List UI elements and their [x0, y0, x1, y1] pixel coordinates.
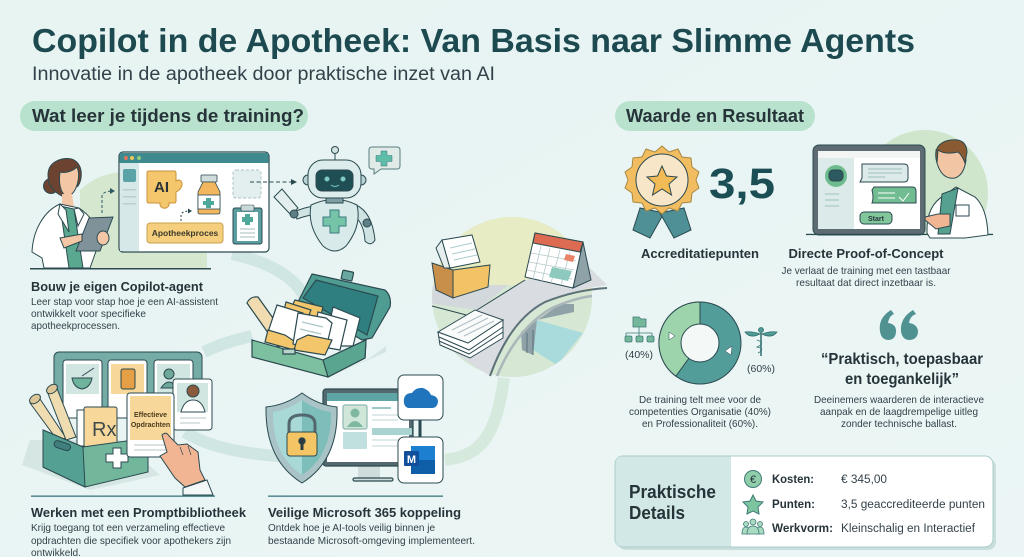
- row: Kosten: Kosten:: [772, 474, 814, 486]
- panel: practical details: [615, 456, 996, 550]
- icon: shield with lock: [266, 393, 337, 483]
- card: Effectieve Opdrachten: Opdrachten: [131, 422, 170, 429]
- row: Werkvorm: Kleinschalig en Interactief: [841, 523, 976, 535]
- heading: value: Waarde en Resultaat: [626, 105, 804, 126]
- icon: mail tile: [398, 437, 443, 483]
- description: ontwikkelt voor specifieke: [31, 308, 146, 320]
- icon: quote marks: [880, 310, 918, 340]
- icon: clipboard: [233, 205, 262, 244]
- description: opdrachten die specifiek voor apothekers zijn: [31, 535, 231, 547]
- label: accreditatiepunten: Accreditatiepunten: [641, 246, 759, 261]
- icon: medicine bottle: [198, 175, 220, 214]
- icon: cloud tile: [398, 375, 443, 420]
- description: De training telt mee voor de: [639, 394, 761, 406]
- description: bestaande Microsoft-omgeving implementeert.: [268, 535, 475, 547]
- description: Deeinemers waarderen de interactieve: [814, 394, 984, 406]
- label: 40%: (40%): [625, 349, 653, 361]
- description: aanpak en de laagdrempelige uitleg: [820, 406, 978, 418]
- heading: value: [615, 101, 815, 131]
- icon: prompt cards and box: [22, 352, 202, 490]
- row: Werkvorm: Werkvorm:: [772, 523, 833, 535]
- panel: accreditation: [625, 146, 775, 261]
- icon: tablet screen: [813, 145, 925, 235]
- panel: secure Microsoft 365: [266, 375, 475, 547]
- description: Ontdek hoe je AI-tools veilig binnen je: [268, 522, 435, 534]
- heading: training: Wat leer je tijdens de training?: [32, 105, 304, 126]
- panel: app window: [119, 152, 269, 252]
- icon: doctor card: [173, 379, 212, 430]
- heading: Praktische Details: Praktische: [629, 482, 716, 502]
- description: competenties Organisatie (40%): [629, 406, 771, 418]
- description: Je verlaat de training met een tastbaar: [782, 265, 951, 277]
- icon: pharmacist pointing: [925, 140, 988, 238]
- label: Apotheekproces: Apotheekproces: [152, 228, 219, 238]
- icon: folder with documents: [432, 235, 490, 298]
- icon: paper stack: [438, 310, 503, 358]
- illustration: bridge with documents and calendar: [425, 215, 607, 380]
- panel: build copilot agent: [30, 146, 400, 332]
- stat: 3,5: 3,5: [709, 160, 775, 208]
- subtitle: Innovatie in de apotheek door praktische inzet van AI: [32, 64, 495, 85]
- quote text: “Praktisch, toepasbaar: [821, 351, 983, 368]
- decorative connecting swooshes: [185, 254, 504, 460]
- icon: medal: [625, 146, 699, 238]
- icon: mail tile: M: [407, 454, 416, 466]
- description: en Professionaliteit (60%).: [642, 418, 758, 430]
- heading: Directe Proof-of-Concept: Directe Proof-of-Concept: [788, 246, 944, 261]
- icon: speech bubble with cross: [369, 147, 400, 174]
- heading: training: [20, 101, 308, 131]
- card: Effectieve Opdrachten: [127, 393, 174, 457]
- panel: prompt library: [22, 352, 247, 557]
- quote text: en toegankelijk”: [845, 371, 959, 388]
- arrow: window to robot: [250, 179, 297, 185]
- row: Kosten: [744, 470, 887, 488]
- panel: proof of concept: [782, 130, 993, 289]
- heading: Werken met een Promptbibliotheek: Werken met een Promptbibliotheek: [31, 505, 247, 520]
- row: Punten: [743, 495, 985, 514]
- card: Effectieve Opdrachten: Effectieve: [134, 412, 167, 419]
- icon: open toolbox with documents: [247, 270, 390, 377]
- row: Werkvorm: [742, 519, 976, 535]
- row: Punten: 3,5 geaccrediteerde punten: [841, 499, 985, 511]
- row: Kosten: €: [750, 474, 756, 486]
- icon: monitor: [323, 389, 413, 481]
- icon: prompt cards and box: Rx: [92, 419, 116, 441]
- icon: caduceus: [745, 328, 777, 356]
- icon: pharmacist with tablet: [32, 159, 207, 268]
- heading: Bouw je eigen Copilot-agent: Bouw je eigen Copilot-agent: [31, 279, 204, 294]
- title: Copilot in de Apotheek: Van Basis naar Slimme Agents: [32, 22, 915, 59]
- icon: AI puzzle piece: AI: [154, 179, 169, 196]
- description: resultaat dat direct inzetbaar is.: [796, 277, 936, 289]
- description: Leer stap voor stap hoe je een AI-assistent: [31, 296, 218, 308]
- panel: testimonial quote: [814, 310, 984, 430]
- icon: AI puzzle piece: [147, 171, 182, 208]
- row: Punten: Punten:: [772, 499, 815, 511]
- description: Krijg toegang tot een verzameling effectieve: [31, 522, 225, 534]
- description: zonder technische ballast.: [841, 418, 957, 430]
- label: Apotheekproces: [147, 223, 223, 243]
- icon: tablet screen: Start: [868, 216, 885, 223]
- icon: robot: [274, 146, 375, 251]
- panel: competencies donut: [625, 302, 777, 430]
- icon: organisation folder: [625, 317, 654, 342]
- donut chart: [659, 302, 741, 384]
- label: 60%: (60%): [747, 363, 775, 375]
- heading: Praktische Details: Details: [629, 503, 685, 523]
- heading: Veilige Microsoft 365 koppeling: Veilige Microsoft 365 koppeling: [268, 505, 461, 520]
- icon: calendar: [525, 233, 591, 288]
- green backdrop circle: [885, 130, 988, 234]
- icon: pointing hand: [160, 433, 213, 495]
- row: Kosten: € 345,00: [841, 474, 887, 486]
- description: apotheekprocessen.: [31, 320, 120, 332]
